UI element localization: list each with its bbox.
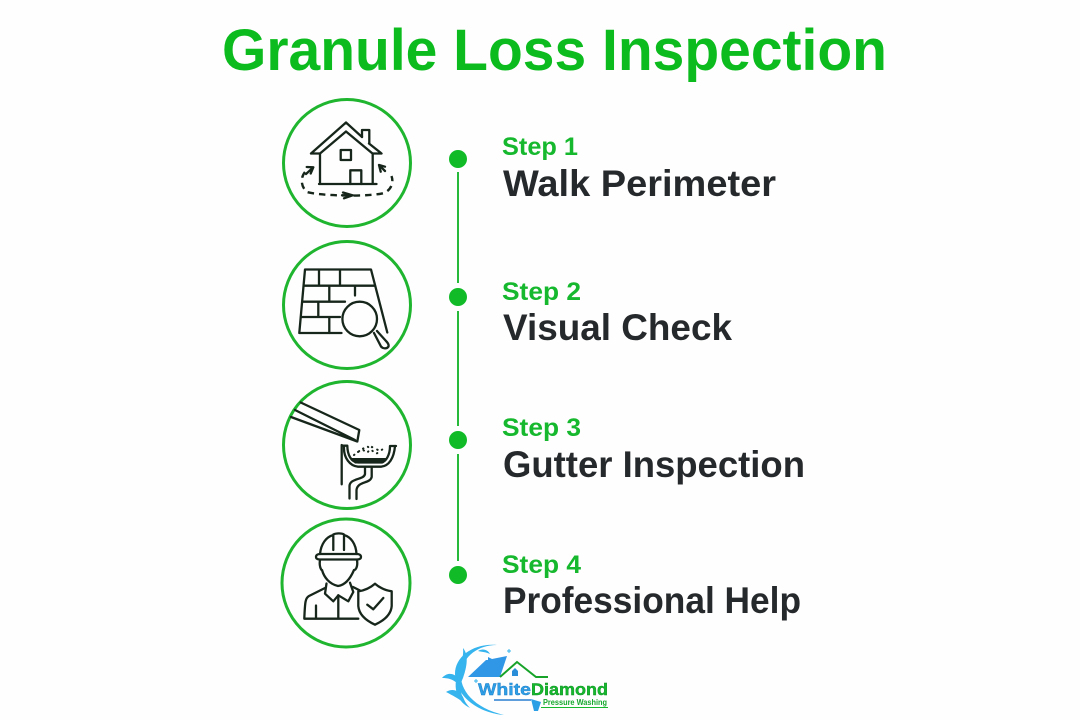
timeline dot 2 xyxy=(449,288,467,306)
step 1 text xyxy=(502,133,776,204)
step 2 text xyxy=(502,278,732,348)
step 2 text: Visual Check xyxy=(503,307,732,348)
timeline dot 4 xyxy=(449,566,467,584)
logo: White Diamond Pressure Washing xyxy=(442,645,608,715)
icon: house with perimeter walk path xyxy=(284,100,410,226)
logo: White Diamond Pressure Washing: White xyxy=(478,680,531,699)
timeline line xyxy=(457,172,459,561)
icon: shingles with magnifying glass xyxy=(284,242,410,368)
step 3 text: Step 3 xyxy=(502,414,581,442)
step 2 text: Step 2 xyxy=(502,278,581,306)
timeline dot 3 xyxy=(449,431,467,449)
icon: gutter with downspout xyxy=(284,382,410,508)
logo: White Diamond Pressure Washing: Diamond xyxy=(531,680,608,699)
step 3 text xyxy=(502,414,805,485)
step 1 text: Walk Perimeter xyxy=(503,163,776,204)
timeline dot 1 xyxy=(449,150,467,168)
step 4 text: Step 4 xyxy=(502,551,581,579)
step 3 text: Gutter Inspection xyxy=(503,444,805,485)
icon: worker with hard hat and shield xyxy=(282,519,410,647)
logo: White Diamond Pressure Washing: Pressure Washing xyxy=(543,698,607,707)
step 1 text: Step 1 xyxy=(502,133,578,161)
step 4 text xyxy=(502,551,801,621)
step 4 text: Professional Help xyxy=(503,580,801,621)
title: Granule Loss Inspection xyxy=(222,18,887,83)
